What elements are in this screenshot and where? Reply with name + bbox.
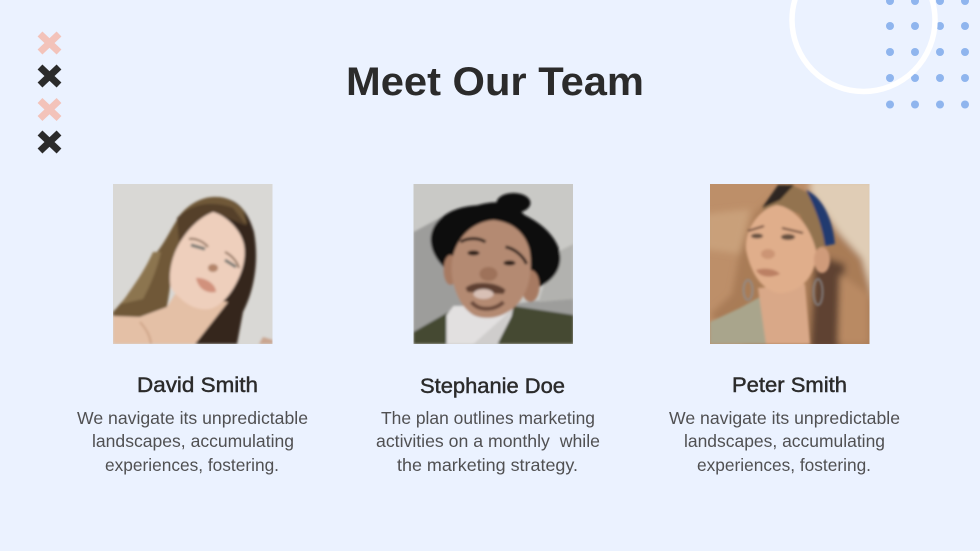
- title: Meet Our Team: [346, 60, 644, 104]
- photo: Peter Smith: [710, 184, 870, 344]
- name: Stephanie Doe: Stephanie Doe: [420, 375, 565, 398]
- description: David Smith: We navigate its unpredictable: [77, 408, 308, 428]
- description: David Smith: experiences, fostering.: [105, 455, 279, 475]
- panel: Peter Smith: [669, 179, 900, 475]
- description: Peter Smith: [669, 408, 900, 475]
- panel: David Smith: [77, 184, 308, 475]
- description: Peter Smith: experiences, fostering.: [697, 455, 871, 475]
- icon: column of crosses: [40, 34, 59, 151]
- description: David Smith: [77, 408, 308, 475]
- photo: David Smith: [113, 184, 273, 344]
- description: David Smith: landscapes, accumulating: [92, 431, 294, 451]
- description: Peter Smith: We navigate its unpredictable: [669, 408, 900, 428]
- name: David Smith: David Smith: [137, 374, 258, 397]
- description: Stephanie Doe: [376, 408, 600, 475]
- photo: Stephanie Doe: [414, 184, 574, 344]
- decorative dot grid: [886, 0, 969, 108]
- name: Peter Smith: Peter Smith: [732, 374, 847, 397]
- panel: Stephanie Doe: [376, 184, 600, 475]
- description: Stephanie Doe: activities on a monthly while: [376, 431, 600, 451]
- description: Stephanie Doe: the marketing strategy.: [397, 455, 578, 475]
- description: Stephanie Doe: The plan outlines marketing: [381, 408, 595, 428]
- description: Peter Smith: landscapes, accumulating: [684, 431, 885, 451]
- decorative white ring: [792, 0, 935, 92]
